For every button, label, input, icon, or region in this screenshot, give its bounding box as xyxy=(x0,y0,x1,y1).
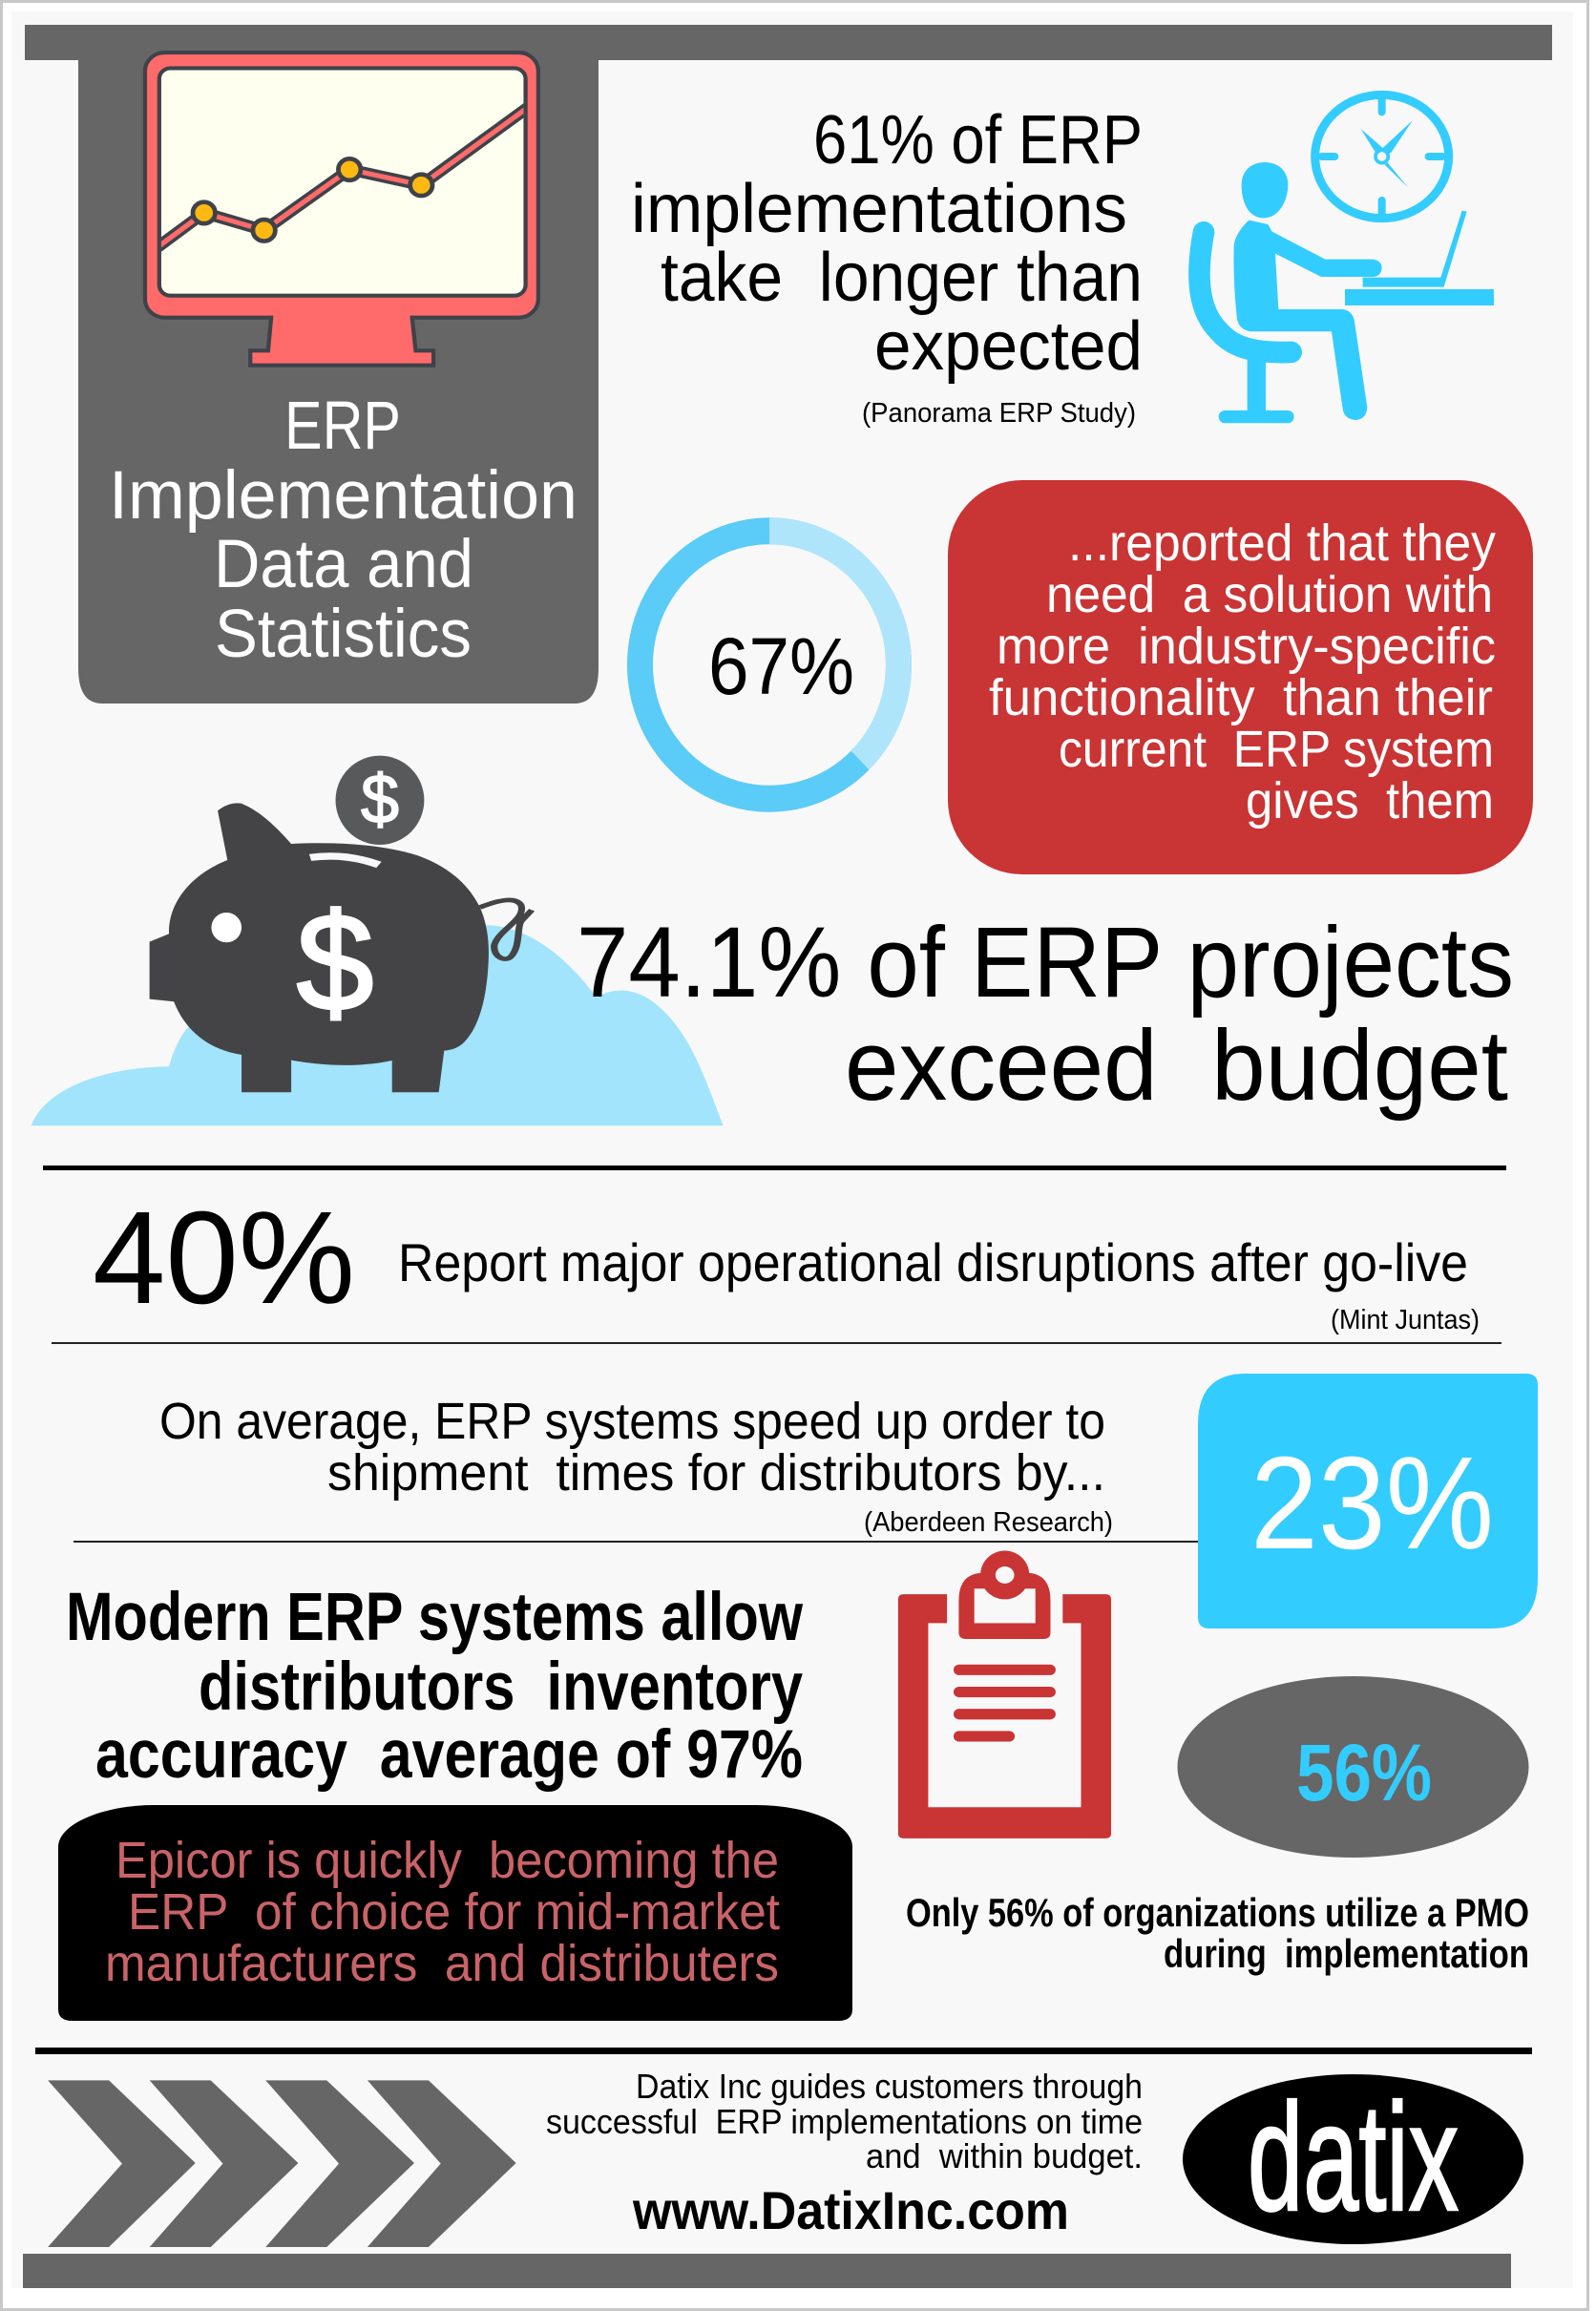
callout: Epicor xyxy=(58,1805,852,2021)
callout: Epicor: ERP of choice for mid-market xyxy=(128,1883,780,1941)
callout: industry-specific functionality xyxy=(948,480,1533,874)
callout: industry-specific functionality: functionality than their xyxy=(989,669,1493,726)
text: Datix summary xyxy=(546,2067,1143,2175)
icon: person at laptop under clock xyxy=(1199,95,1494,423)
top bar xyxy=(25,25,1552,60)
callout: 56% oval: 56% xyxy=(1296,1728,1432,1817)
title text: Statistics xyxy=(215,597,472,672)
stat: 40% disruptions xyxy=(93,1185,1480,1335)
stat: 40% disruptions: (Mint Juntas) xyxy=(1331,1305,1480,1335)
text: Datix summary: Datix Inc guides customers through xyxy=(636,2067,1143,2106)
title text: Implementation xyxy=(109,458,578,534)
icon: clipboard xyxy=(898,1551,1111,1838)
headline: 74.1% exceed budget: 74.1% of ERP projects xyxy=(577,907,1514,1019)
callout: Epicor: manufacturers and distributers xyxy=(105,1935,779,1992)
stat: inventory accuracy xyxy=(66,1580,804,1793)
donut chart: 67% xyxy=(640,531,899,799)
stat: order to shipment xyxy=(159,1393,1113,1538)
callout: industry-specific functionality: more industry-specific xyxy=(997,618,1496,675)
title text xyxy=(109,389,578,672)
stat: 61% longer than expected: (Panorama ERP Study) xyxy=(862,398,1136,429)
panel: title xyxy=(78,53,598,704)
icon: piggy bank on cloud: $ xyxy=(297,885,373,1040)
url: www.DatixInc.com xyxy=(632,2180,1069,2240)
callout: industry-specific functionality: ...reported that they xyxy=(1068,515,1496,572)
stat: 61% longer than expected: expected xyxy=(874,308,1143,385)
icon: chevron arrows xyxy=(48,2080,516,2247)
callout: 23%: 23% xyxy=(1250,1430,1494,1577)
text: Datix summary: and within budget. xyxy=(866,2136,1143,2175)
stat: PMO usage: during implementation xyxy=(1164,1931,1529,1976)
stat: order to shipment: On average, ERP systems speed up order to xyxy=(159,1393,1105,1450)
stat: order to shipment: (Aberdeen Research) xyxy=(864,1507,1113,1538)
headline: 74.1% exceed budget: exceed budget xyxy=(845,1010,1508,1122)
icon: piggy bank on cloud: $ xyxy=(361,762,399,838)
stat: 40% disruptions: 40% xyxy=(93,1185,355,1332)
bottom bar xyxy=(23,2254,1511,2288)
headline: 74.1% exceed budget xyxy=(577,907,1514,1122)
stat: 61% longer than expected: implementations xyxy=(631,171,1127,247)
title text: Data and xyxy=(214,527,473,602)
stat: 61% longer than expected: take longer than xyxy=(661,240,1143,316)
donut chart: 67%: 67% xyxy=(708,621,854,711)
stat: order to shipment: shipment times for distributors by... xyxy=(327,1444,1105,1502)
stat: PMO usage xyxy=(906,1890,1529,1976)
callout: 56% oval xyxy=(1178,1676,1529,1858)
stat: 61% longer than expected: 61% of ERP xyxy=(813,102,1143,179)
callout: Epicor: Epicor is quickly becoming the xyxy=(116,1832,779,1889)
callout: industry-specific functionality: current ERP system xyxy=(1059,721,1494,778)
title text: ERP xyxy=(284,389,401,464)
callout: 23% xyxy=(1198,1374,1538,1628)
callout: industry-specific functionality: gives them xyxy=(1246,772,1494,830)
stat: 40% disruptions: Report major operational disruptions after go-live xyxy=(398,1232,1468,1292)
stat: 61% longer than expected xyxy=(631,102,1143,429)
icon: piggy bank on cloud xyxy=(32,756,724,1125)
stat: inventory accuracy: accuracy average of 97% xyxy=(95,1717,803,1793)
stat: inventory accuracy: distributors inventory xyxy=(199,1649,803,1725)
stat: inventory accuracy: Modern ERP systems allow xyxy=(66,1580,804,1655)
text: Datix summary: successful ERP implementations on time xyxy=(546,2102,1143,2141)
logo: datix: datix xyxy=(1248,2071,1459,2242)
callout: industry-specific functionality: need a solution with xyxy=(1046,566,1493,623)
icon: monitor with line chart xyxy=(145,53,538,366)
